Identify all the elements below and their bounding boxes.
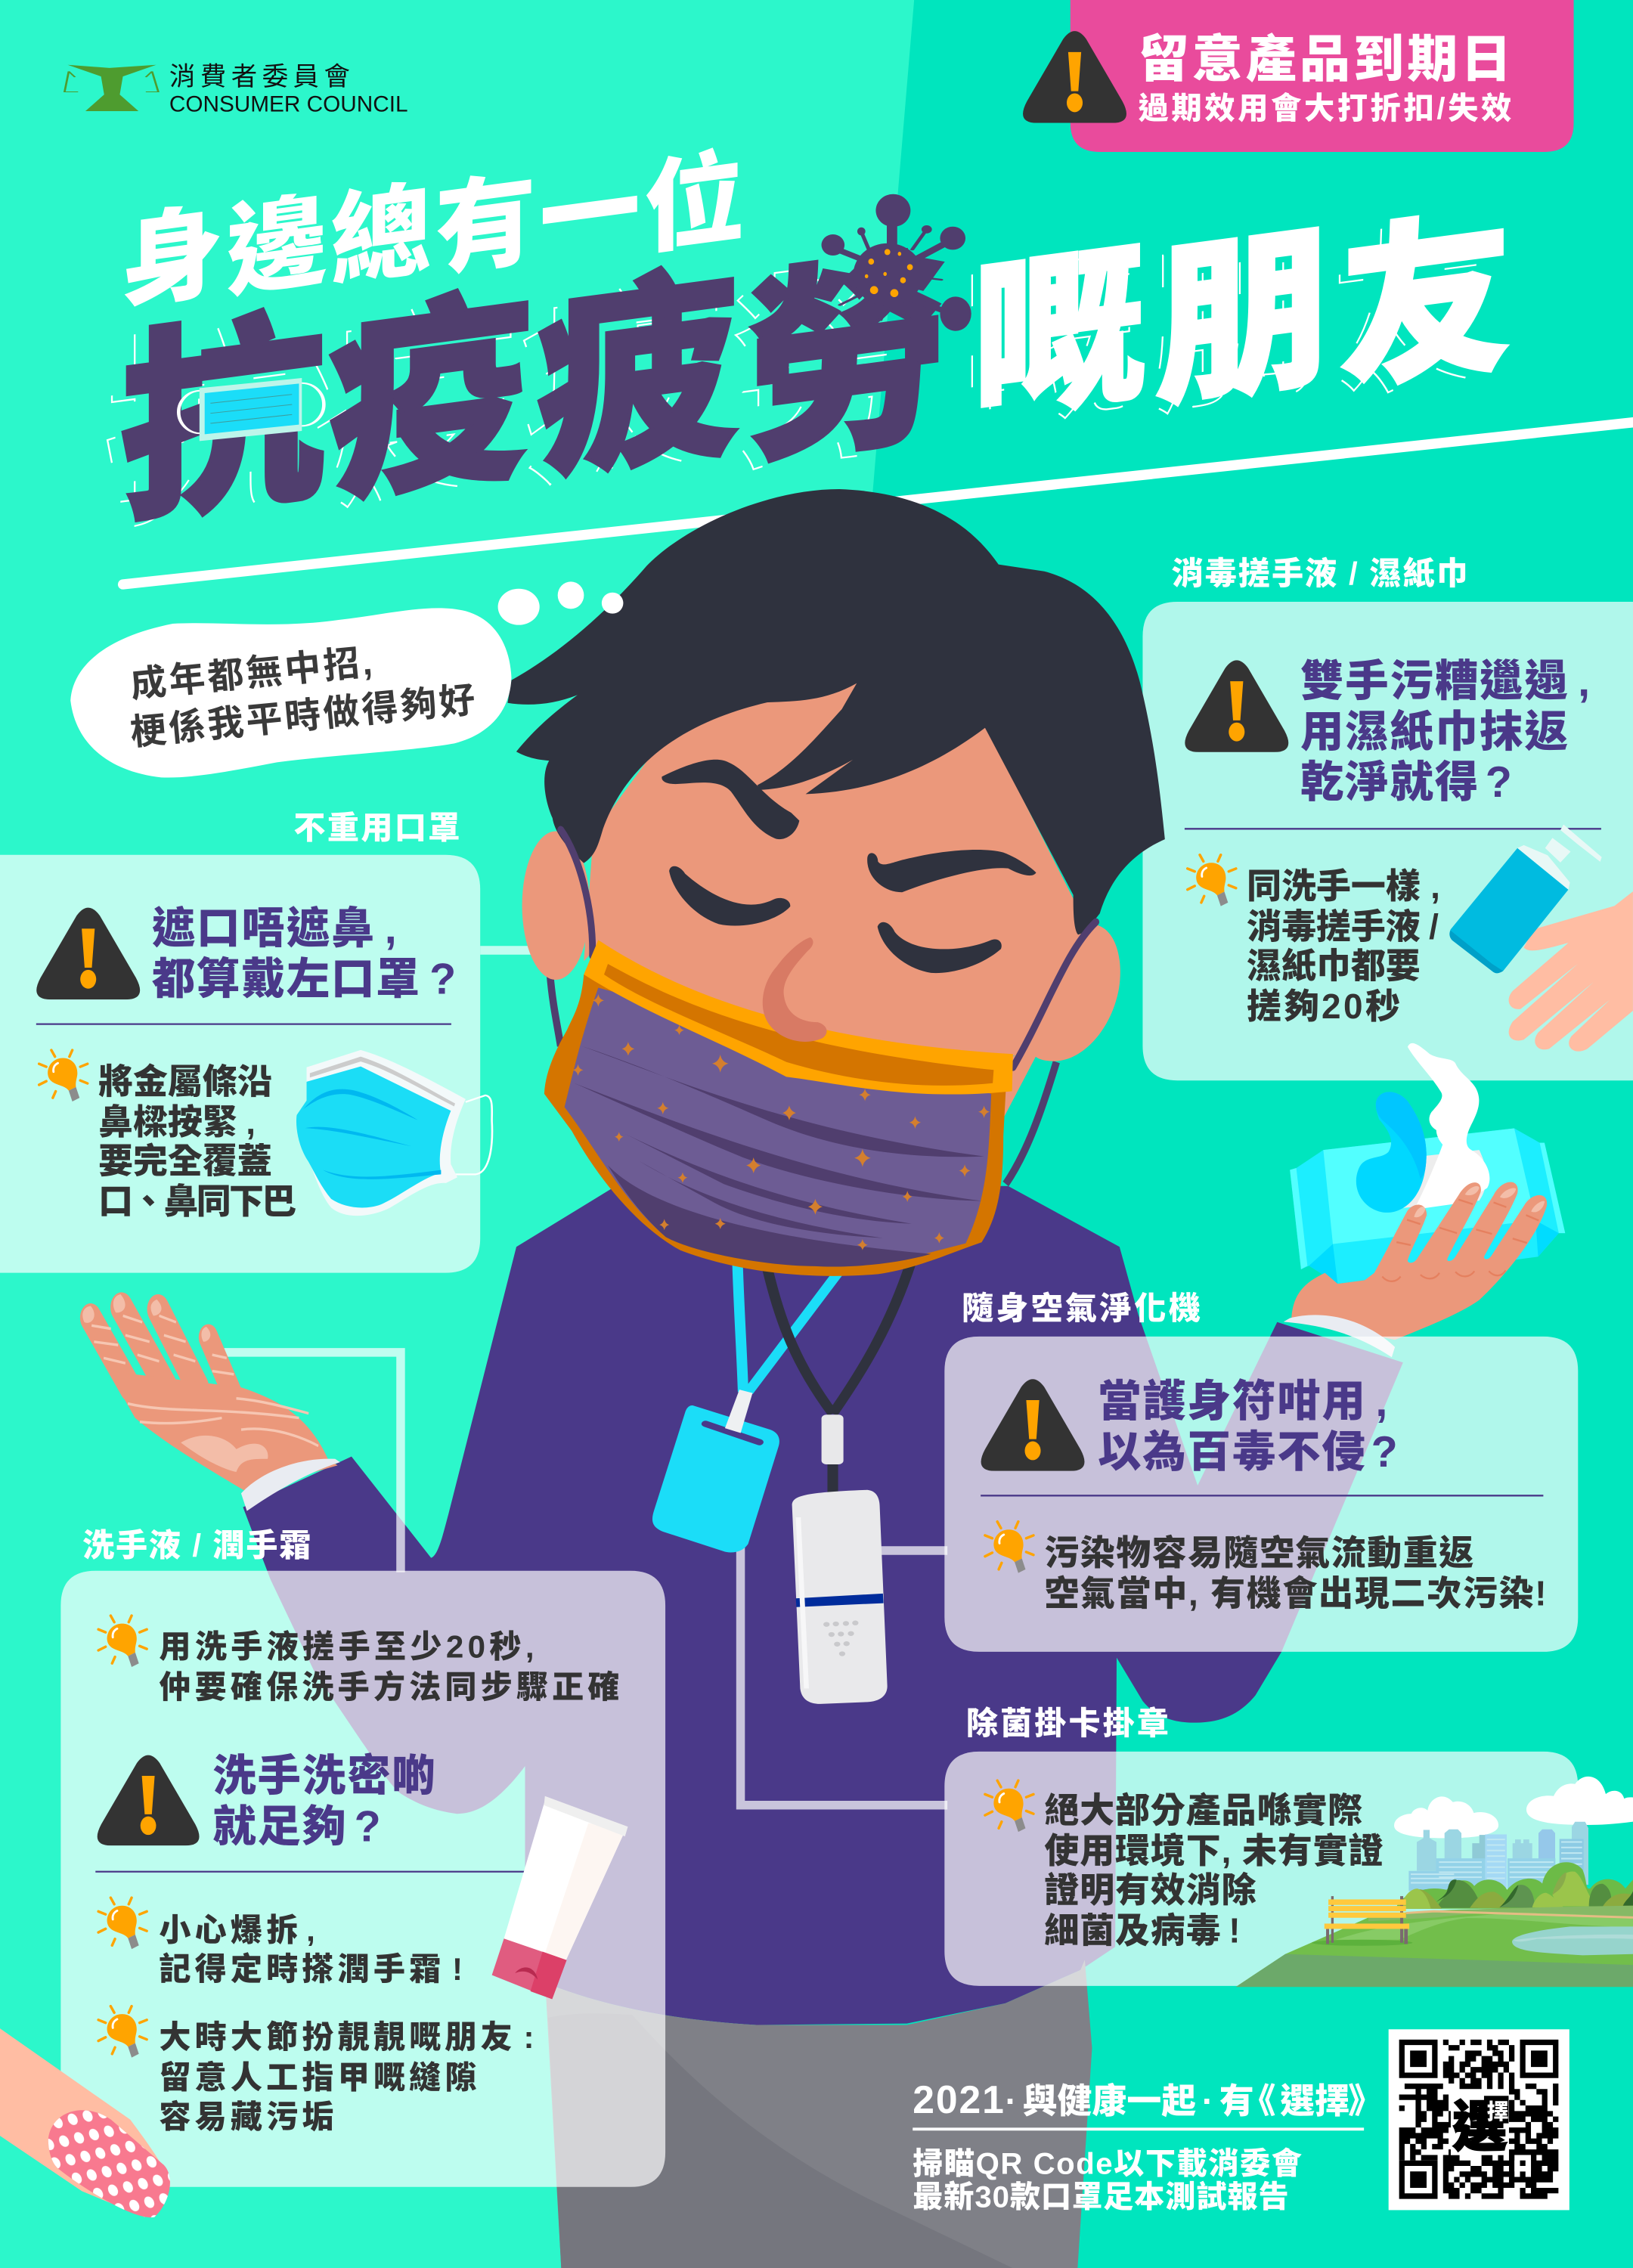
- icon: hand cream tube: [492, 1796, 627, 1999]
- thought bubble: [70, 581, 623, 777]
- bubble text: 梗係我平時做得夠好: [129, 680, 479, 753]
- tip text 3: 大時大節扮靚靚嘅朋友 :: [159, 2019, 538, 2055]
- tip text: 要完全覆蓋: [98, 1142, 272, 1181]
- footer text: 最新30款口罩足本測試報告: [913, 2180, 1289, 2214]
- heading: 用濕紙巾抹返: [1300, 708, 1569, 756]
- bench: [1312, 1896, 1412, 1946]
- panel: portable air purifier: [944, 1290, 1578, 1652]
- right eye: [878, 922, 1002, 973]
- callout: check expiry date: [1023, 0, 1574, 152]
- icon: warning: [1185, 660, 1288, 752]
- footer text: 有: [1219, 2081, 1254, 2121]
- neck: [1001, 1054, 1037, 1123]
- left brow: [662, 760, 799, 839]
- QR centre logo: 選: [1452, 2097, 1508, 2158]
- panel: sanitising card: [944, 1706, 1578, 1986]
- panel: sanitiser and wipes: [1142, 556, 1633, 1080]
- QR centre logo: 擇: [1487, 2100, 1508, 2124]
- tip text: 污染物容易隨空氣流動重返: [1044, 1533, 1475, 1572]
- panel: hand wash and cream: [60, 1528, 665, 2187]
- cloud left: [1394, 1796, 1498, 1838]
- label: 隨身空氣淨化機: [962, 1290, 1201, 1326]
- callout: check expiry date: 過期效用會大打折扣/失效: [1139, 91, 1511, 125]
- label: 消毒搓手液 / 濕紙巾: [1172, 556, 1468, 591]
- footer text: ·: [1202, 2081, 1213, 2121]
- icon: warning: [36, 908, 140, 999]
- logo: Consumer Council: CONSUMER COUNCIL: [169, 91, 408, 116]
- ground: [1236, 1906, 1633, 1987]
- buildings: [1408, 1822, 1588, 1891]
- heading: 乾淨就得 ?: [1300, 758, 1514, 807]
- cloud right: [1526, 1777, 1633, 1825]
- heading: 遮口唔遮鼻 ,: [152, 904, 398, 953]
- footer text: 選擇: [1280, 2081, 1349, 2121]
- sanitising card text: 使用環境下, 未有實證: [1044, 1831, 1384, 1870]
- tip text: 口、鼻同下巴: [98, 1182, 296, 1221]
- title: 抗疫疲勞: 抗疫疲勞: [104, 219, 937, 580]
- icon: bulb: [985, 1522, 1033, 1573]
- sanitising card text: [985, 1780, 1384, 1950]
- tip text: 空氣當中, 有機會出現二次污染!: [1044, 1574, 1548, 1613]
- tip text 2: 小心爆拆 ,: [159, 1913, 319, 1948]
- footer text: [913, 2077, 1383, 2214]
- logo: Consumer Council: 消費者委員會: [169, 63, 355, 91]
- tip text 1: 用洗手液搓手至少20秒,: [159, 1629, 538, 1665]
- icon: clip toggle: [822, 1414, 844, 1464]
- callout: check expiry date: 留意產品到期日: [1139, 31, 1511, 88]
- tip text: 將金屬條沿: [98, 1061, 272, 1101]
- wipes pack: [1290, 1128, 1565, 1284]
- tip text: 消毒搓手液 /: [1247, 907, 1439, 947]
- icon: bulb: [98, 1898, 147, 1949]
- label: 除菌掛卡掛章: [966, 1706, 1169, 1741]
- icon: scales: [64, 65, 158, 111]
- pond: [1512, 1926, 1633, 1955]
- title line 1: 身邊總有一位: [122, 125, 748, 336]
- QR code: [1389, 2029, 1569, 2210]
- icon: warning: [1023, 31, 1126, 123]
- ear loops behind: [550, 974, 1056, 1184]
- tip text 3: 容易藏污垢: [159, 2099, 338, 2134]
- sanitising card text: 證明有效消除: [1044, 1870, 1257, 1910]
- title: 抗疫疲勞: 抗疫疲勞: [120, 212, 953, 572]
- tip text: 同洗手一樣 ,: [1247, 866, 1440, 906]
- cuff: [1284, 1315, 1395, 1357]
- icon: portable air purifier: [792, 1490, 888, 1704]
- tip text: 濕紙巾都要: [1247, 946, 1421, 985]
- footer text: 》: [1348, 2081, 1383, 2121]
- icon: dry cracked left hand: [82, 1294, 338, 1492]
- icon: warning: [981, 1379, 1084, 1471]
- face mask: [544, 940, 1013, 1276]
- icon: bulb: [985, 1780, 1033, 1832]
- title: 嘅朋友: 嘅朋友: [962, 185, 1513, 469]
- icon: right hand holding wipes: [1284, 1043, 1565, 1357]
- sanitising card text: 絕大部分產品喺實際: [1044, 1791, 1363, 1830]
- sanitising card text: 細菌及病毒 !: [1044, 1910, 1241, 1950]
- illustration: park scenery: [1236, 1777, 1633, 1987]
- footer text: ·: [1006, 2081, 1017, 2121]
- icon: warning: [98, 1755, 200, 1845]
- blue tear drop: [1356, 1092, 1427, 1213]
- heading: 洗手洗密啲: [212, 1752, 437, 1801]
- tip text: 搓夠20秒: [1247, 987, 1400, 1026]
- ear right: [1027, 924, 1120, 1061]
- tip text: 鼻樑按緊 ,: [98, 1102, 256, 1142]
- icon: surgical mask: [296, 1050, 492, 1216]
- tip text 1: 仲要確保洗手方法同步驟正確: [159, 1669, 624, 1705]
- bubble text: 成年都無中招,: [129, 642, 376, 705]
- nose: [763, 937, 827, 1042]
- hand: [1291, 1182, 1547, 1340]
- left eye: [669, 866, 790, 925]
- icon: bulb: [1188, 855, 1236, 906]
- logo: Consumer Council: [64, 63, 408, 116]
- lanyards and devices: [652, 1262, 911, 1704]
- character: head with mask: [507, 489, 1165, 1276]
- icon: mask on title: [178, 378, 324, 441]
- divider line under title: [123, 423, 1633, 584]
- tip text 2: 記得定時搽潤手霜 !: [159, 1951, 466, 1987]
- icon: finger with dotted nail: [0, 2028, 170, 2217]
- footer text: 掃瞄QR Code以下載消委會: [913, 2147, 1302, 2181]
- tip text 3: 留意人工指甲嘅縫隙: [159, 2060, 481, 2096]
- icon: bulb: [98, 1616, 147, 1667]
- face: [584, 675, 1086, 1057]
- title: 嘅朋友: 嘅朋友: [972, 177, 1523, 460]
- wet wipe: [1408, 1043, 1489, 1210]
- ear left: [522, 832, 590, 980]
- dark lanyard: [767, 1262, 911, 1493]
- icon: sanitiser bottle and hand: [1449, 825, 1633, 1052]
- label: 不重用口罩: [293, 810, 460, 846]
- icon: bulb: [98, 2006, 147, 2058]
- bushes: [1396, 1862, 1633, 1909]
- label: 洗手液 / 潤手霜: [82, 1528, 311, 1563]
- panel: mask not reused: [0, 810, 480, 1273]
- icon: bulb: [39, 1050, 88, 1101]
- ear loops front: [561, 829, 1096, 1067]
- blue lanyard: [738, 1262, 839, 1392]
- icon: virus: [822, 194, 971, 331]
- hair: [507, 489, 1165, 934]
- cuff: left sleeve: [241, 1459, 340, 1511]
- connector lines: [225, 950, 947, 1805]
- heading: 都算戴左口罩 ?: [152, 955, 457, 1003]
- character: trousers: [545, 1960, 1092, 2268]
- icon: id badge holder: [652, 1390, 779, 1552]
- character: body: [243, 1183, 1403, 2025]
- footer text: 《: [1241, 2081, 1275, 2121]
- footer text: 2021: [913, 2077, 1006, 2121]
- heading: 以為百毒不侵?: [1098, 1428, 1399, 1476]
- bubble text: [129, 642, 479, 753]
- heading: 當護身符咁用 ,: [1098, 1377, 1389, 1426]
- right brow: [867, 850, 1037, 892]
- footer text: 與健康一起: [1023, 2081, 1196, 2121]
- heading: 雙手污糟邋遢 ,: [1300, 657, 1591, 705]
- heading: 就足夠 ?: [212, 1803, 383, 1851]
